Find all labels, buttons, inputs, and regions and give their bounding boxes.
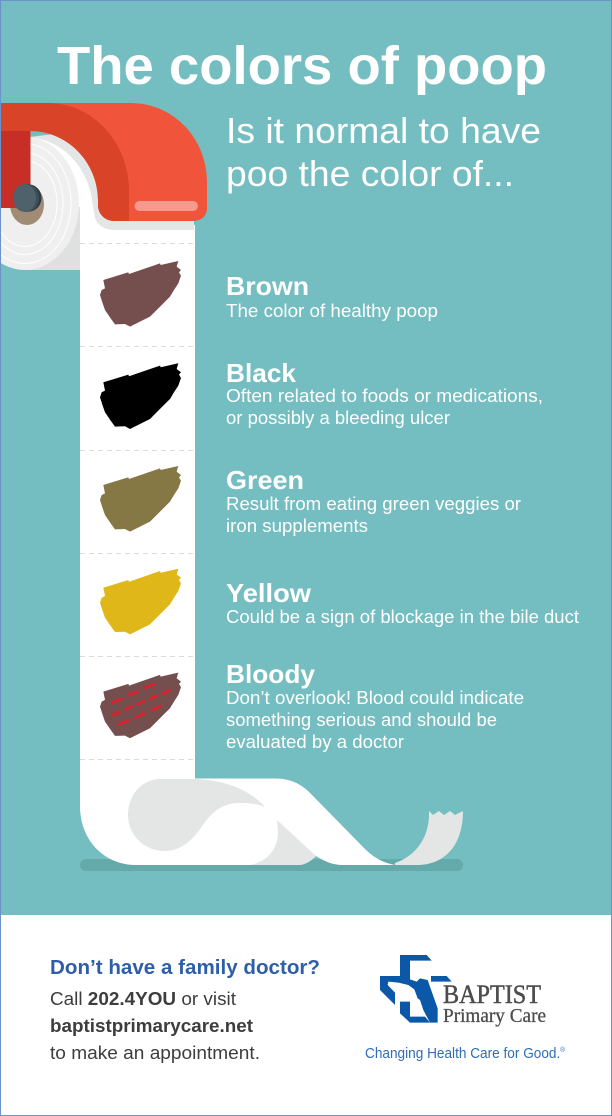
item: green: Result from eating green veggies or [226, 494, 521, 514]
red holder cover [0, 103, 207, 221]
subtitle: poo the color of... [226, 153, 514, 194]
paper shadow [30, 134, 194, 230]
brush swatch: brown [100, 261, 181, 327]
paper strip [30, 137, 395, 865]
item: yellow [226, 578, 579, 627]
item: green: Green [226, 465, 304, 495]
floor shadow [80, 859, 463, 871]
logo tagline: ® [560, 1046, 566, 1054]
roll core hole [10, 184, 44, 225]
item: green: iron supplements [226, 516, 368, 536]
logo wordmark [443, 980, 546, 1027]
item: yellow: Yellow [226, 578, 312, 608]
axle cap [13, 184, 42, 212]
item: yellow: Could be a sign of blockage in the bile duct [226, 607, 579, 627]
brush swatch: yellow [100, 569, 181, 634]
loose paper tail [128, 779, 463, 865]
bracket arm [0, 131, 30, 208]
logo tagline: Changing Health Care for Good. [365, 1045, 580, 1062]
brush swatch: black [100, 363, 181, 429]
subtitle [226, 110, 541, 194]
item: green [226, 465, 521, 536]
call to action text [50, 989, 260, 1063]
brush swatch: bloody [100, 673, 181, 738]
logo wordmark: BAPTIST [443, 980, 541, 1009]
title: The colors of poop [57, 36, 547, 96]
item: bloody: something serious and should be [226, 710, 497, 730]
item: brown: Brown [226, 271, 309, 301]
item: black: or possibly a bleeding ulcer [226, 408, 450, 428]
logo wordmark: Primary Care [443, 1005, 546, 1027]
brush swatch: green [100, 466, 181, 532]
item: bloody: Don’t overlook! Blood could indicate [226, 688, 524, 708]
item: bloody: evaluated by a doctor [226, 732, 404, 752]
call to action heading: Don’t have a family doctor? [50, 957, 320, 979]
footer panel [0, 915, 612, 1116]
call to action text: Call 202.4YOU or visit [50, 989, 236, 1009]
illustration: toilet paper roll [0, 103, 463, 871]
item: bloody: Bloody [226, 659, 316, 689]
logo icon: cross and Florida [380, 955, 452, 1023]
item: brown: The color of healthy poop [226, 301, 438, 321]
item: black: Often related to foods or medications, [226, 386, 543, 406]
item: bloody [226, 659, 524, 752]
call to action text: baptistprimarycare.net [50, 1016, 253, 1036]
item: black: Black [226, 358, 297, 388]
item: black [226, 358, 543, 428]
item: brown [226, 271, 438, 321]
perforation lines [80, 244, 195, 760]
roll of paper [0, 137, 80, 270]
call to action text: to make an appointment. [50, 1043, 260, 1063]
subtitle: Is it normal to have [226, 110, 541, 151]
